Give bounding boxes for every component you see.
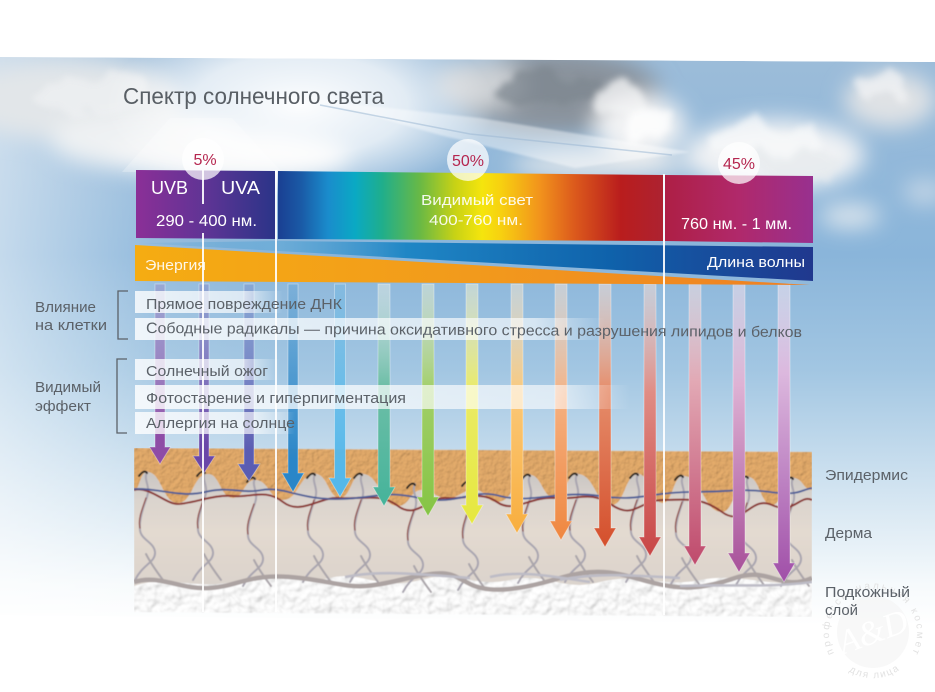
infrared bar <box>665 175 813 243</box>
group label: visible effect: эффект <box>35 398 91 415</box>
arrow 8 yellow <box>461 284 483 524</box>
divider lines <box>203 170 664 615</box>
background sky photo <box>0 57 935 590</box>
group label: visible effect <box>35 379 101 415</box>
bracket: visible effect <box>117 359 127 433</box>
text: free radicals: Сободные радикалы — причина оксидативного стресса и разрушения липидов и белков <box>146 320 802 341</box>
dermis layer <box>134 448 812 600</box>
title: Спектр солнечного света <box>123 83 384 109</box>
badge 45% <box>718 142 760 184</box>
subcutaneous fat layer <box>134 576 812 617</box>
badge 5% <box>182 138 224 180</box>
label: subcutaneous layer: Подкожный <box>825 584 910 601</box>
label: subcutaneous layer: слой <box>825 602 858 619</box>
text: photoaging: Фотостарение и гиперпигментация <box>146 390 406 407</box>
energy wedge <box>135 245 810 285</box>
arrow 2 UVB-UVA <box>193 284 215 473</box>
energy label: Энергия <box>145 258 206 274</box>
layer labels <box>825 467 910 619</box>
skin cross-section <box>134 448 812 617</box>
UV range: 290 - 400 нм. <box>156 213 257 230</box>
arrow 10 orange <box>550 284 572 540</box>
group label: cell impact: Влияние <box>35 299 96 316</box>
text: DNA damage: Прямое повреждение ДНК <box>146 296 342 313</box>
detailed cloud edges <box>30 72 909 181</box>
band: photoaging <box>135 385 630 409</box>
arrow 11 red-orange <box>594 284 616 547</box>
spectrum bars <box>136 170 813 243</box>
bracket: cell impact <box>118 291 128 339</box>
band: free radicals <box>135 318 605 340</box>
watermark: профессиональная косметика <box>822 584 922 655</box>
epidermis layer <box>134 448 812 512</box>
arrow 6 teal <box>373 284 395 506</box>
arrow 5 light blue <box>329 284 351 497</box>
percentage badges <box>182 138 760 184</box>
wavelength label: Длина волны <box>707 254 805 271</box>
badge 50% <box>447 139 489 181</box>
UV bar <box>136 170 275 239</box>
band: DNA damage <box>135 291 283 313</box>
label: subcutaneous layer <box>825 584 910 619</box>
badge 45%: 45% <box>723 156 755 173</box>
band: sun allergy <box>135 412 295 434</box>
badge 50%: 50% <box>452 153 484 170</box>
blood vessels <box>134 472 812 592</box>
watermark: для лица <box>848 666 899 678</box>
group label: cell impact: на клетки <box>35 317 107 334</box>
arrow 13 crimson <box>684 284 706 565</box>
UVB label: UVB <box>151 178 188 198</box>
arrow 15 purple <box>773 284 795 582</box>
band: sunburn <box>135 359 280 380</box>
arrow 4 blue <box>282 284 304 492</box>
watermark: A&D <box>831 603 914 663</box>
arrow 7 green <box>417 284 439 516</box>
badge 5%: 5% <box>193 152 217 169</box>
arrow 14 magenta <box>728 284 750 572</box>
effect text rows <box>146 296 802 432</box>
visible range: 400-760 нм. <box>429 212 523 229</box>
arrow 3 UVA <box>238 284 260 481</box>
group label: cell impact <box>35 299 107 334</box>
arrow 12 red <box>639 284 661 556</box>
visible light label: Видимый свет <box>421 192 533 209</box>
arrow 9 amber <box>506 284 528 533</box>
spectrum arrows <box>150 284 795 582</box>
group label: visible effect: Видимый <box>35 379 101 396</box>
UVA label: UVA <box>221 178 260 198</box>
label: epidermis: Эпидермис <box>825 467 909 484</box>
light rays <box>122 164 162 172</box>
arrow 1 UVB <box>150 284 170 464</box>
effect rows <box>135 291 630 434</box>
bar labels <box>145 178 805 274</box>
text: sun allergy: Аллергия на солнце <box>146 415 295 432</box>
visible light bar <box>278 171 663 241</box>
text: sunburn: Солнечный ожог <box>146 363 269 380</box>
infrared range: 760 нм. - 1 мм. <box>681 216 792 233</box>
wavelength wedge <box>136 241 813 281</box>
soft cloud masses <box>0 50 935 228</box>
label: dermis: Дерма <box>825 525 873 542</box>
